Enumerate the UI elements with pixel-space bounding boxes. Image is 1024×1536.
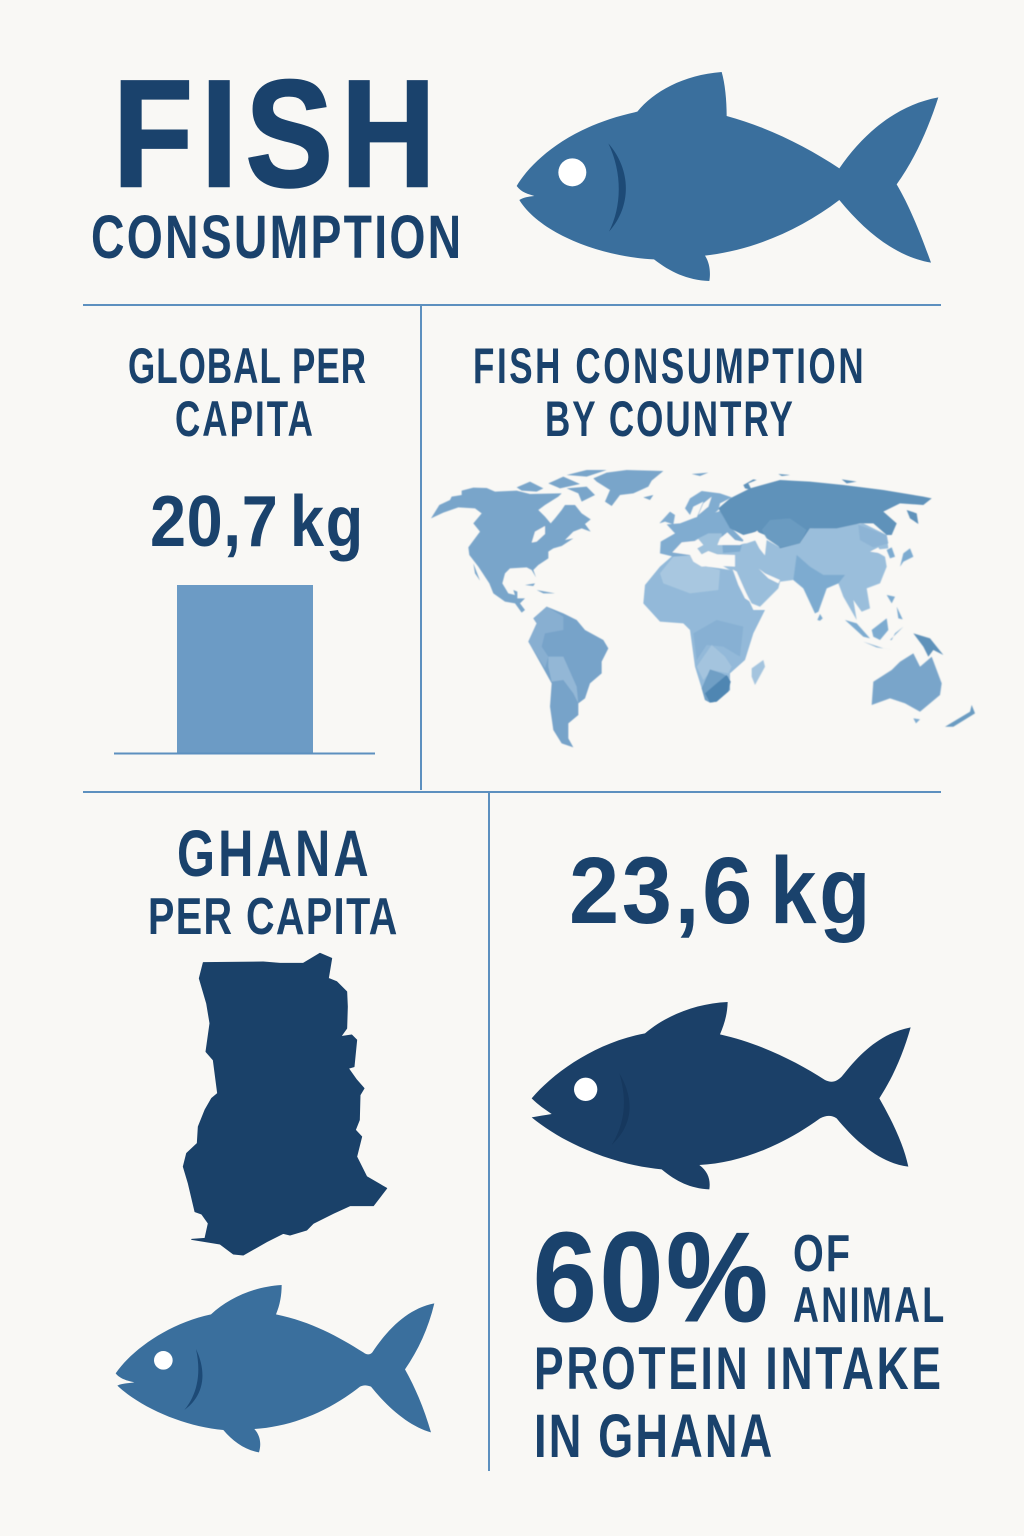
- title: FISH: FISH: [113, 50, 436, 219]
- panel: header: [91, 50, 938, 281]
- icon: large blue fish: [517, 72, 938, 281]
- statistic: 60% of animal protein intake in Ghana: [533, 1206, 944, 1471]
- heading: Ghana per capita: GHANA: [177, 817, 369, 891]
- heading: global per capita: GLOBAL PER: [128, 339, 366, 395]
- heading: fish consumption by country: [473, 339, 864, 448]
- Seas: [672, 531, 780, 602]
- map: Ghana silhouette: [183, 953, 387, 1255]
- statistic: 60% of animal protein intake in Ghana: PROTEIN INTAKE: [534, 1336, 941, 1403]
- value: 20,7kg: [150, 481, 363, 562]
- icon: small blue fish: [116, 1285, 434, 1452]
- value: 20,7kg: 20,7: [150, 481, 278, 562]
- value: 23,6 kg: kg: [770, 837, 870, 943]
- world map choropleth: [431, 470, 975, 747]
- panel: Ghana statistics: [532, 837, 944, 1471]
- heading: fish consumption by country: FISH CONSUMPTION: [473, 339, 864, 395]
- value: 20,7kg: kg: [290, 482, 363, 562]
- Islands and Oceania: [752, 547, 975, 727]
- subtitle: CONSUMPTION: CONSUMPTION: [91, 204, 461, 272]
- statistic: 60% of animal protein intake in Ghana: IN GHANA: [534, 1402, 772, 1471]
- statistic: 60% of animal protein intake in Ghana: ANIMAL: [793, 1278, 944, 1333]
- panel: fish consumption by country: [431, 339, 975, 747]
- statistic: 60% of animal protein intake in Ghana: 60%: [533, 1206, 768, 1348]
- heading: fish consumption by country: BY COUNTRY: [545, 392, 793, 448]
- South America: [528, 607, 608, 747]
- panel: global per capita: [114, 339, 375, 754]
- Eurasia and Africa: [643, 474, 932, 703]
- icon: dark navy fish: [532, 1002, 911, 1189]
- statistic: 60% of animal protein intake in Ghana: OF: [793, 1224, 850, 1282]
- Russia layer: [718, 474, 932, 548]
- bar chart: global per capita bar: [114, 585, 375, 754]
- Asia layer: [713, 523, 888, 620]
- heading: Ghana per capita: PER CAPITA: [148, 887, 397, 945]
- Europe layer: [659, 491, 743, 558]
- value: 23,6 kg: [569, 837, 870, 944]
- heading: global per capita: [128, 339, 366, 448]
- panel: Ghana per capita: [116, 817, 434, 1452]
- heading: global per capita: CAPITA: [175, 392, 313, 448]
- heading: Ghana per capita: [148, 817, 397, 945]
- value: 23,6 kg: 23,6: [569, 837, 752, 944]
